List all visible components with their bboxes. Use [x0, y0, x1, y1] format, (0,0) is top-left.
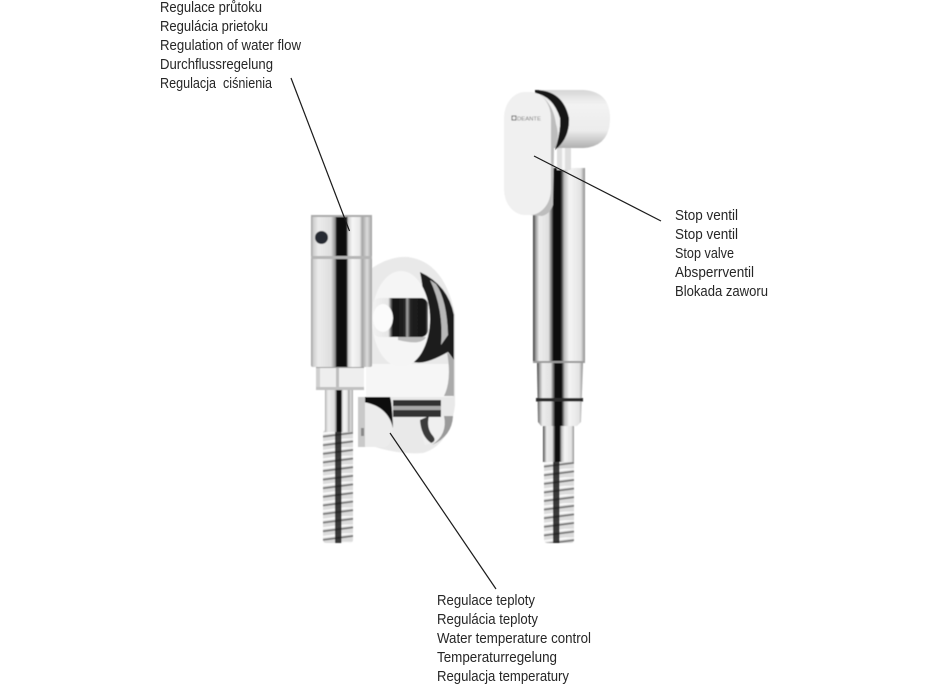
lower collar	[537, 362, 583, 426]
black ring	[536, 398, 583, 402]
leader line: stop valve	[534, 156, 661, 221]
label: stop valve	[675, 208, 768, 300]
hex nut	[316, 366, 364, 390]
cap hole	[315, 231, 328, 244]
black collar arc	[535, 90, 569, 150]
leader line: flow regulation	[291, 78, 350, 231]
label: stop valve: Stop ventil	[675, 227, 738, 243]
seam	[533, 361, 585, 363]
label: temperature control: Regulacja temperatury	[437, 669, 570, 685]
label: flow regulation: Durchflussregelung	[160, 57, 273, 73]
wall plate	[366, 257, 455, 453]
main body	[533, 168, 585, 363]
logo mark: DEANTE	[517, 116, 541, 122]
label: flow regulation: Regulace průtoku	[160, 0, 262, 16]
label: flow regulation: Regulacja ciśnienia	[160, 76, 273, 92]
label: flow regulation: Regulation of water flow	[160, 38, 301, 54]
lever	[358, 397, 441, 447]
label: stop valve: Stop valve	[675, 246, 734, 262]
cylinder body with flow regulator cap	[311, 215, 372, 367]
lever plate	[504, 92, 551, 215]
diagram: hand spray	[504, 90, 610, 543]
head cylinder	[540, 90, 610, 148]
flexible hose	[544, 460, 574, 543]
label: stop valve: Stop ventil	[675, 208, 738, 224]
thin neck	[557, 148, 571, 170]
lever chrome edge	[530, 92, 558, 216]
label: temperature control	[437, 593, 591, 685]
label: flow regulation	[160, 0, 301, 92]
label: flow regulation: Regulácia prietoku	[160, 19, 268, 35]
flexible hose	[323, 430, 353, 543]
round disc and stem	[372, 271, 430, 367]
label: temperature control: Regulace teploty	[437, 593, 536, 609]
label: stop valve: Absperrventil	[675, 265, 754, 281]
label: temperature control: Water temperature control	[437, 631, 591, 647]
leader line: temperature control	[390, 433, 496, 589]
diagram: wall-mounted valve	[311, 215, 455, 543]
label: stop valve: Blokada zaworu	[675, 284, 768, 300]
label: temperature control: Temperaturregelung	[437, 650, 557, 666]
neck	[325, 390, 353, 432]
lower neck	[543, 425, 574, 462]
label: temperature control: Regulácia teploty	[437, 612, 539, 628]
